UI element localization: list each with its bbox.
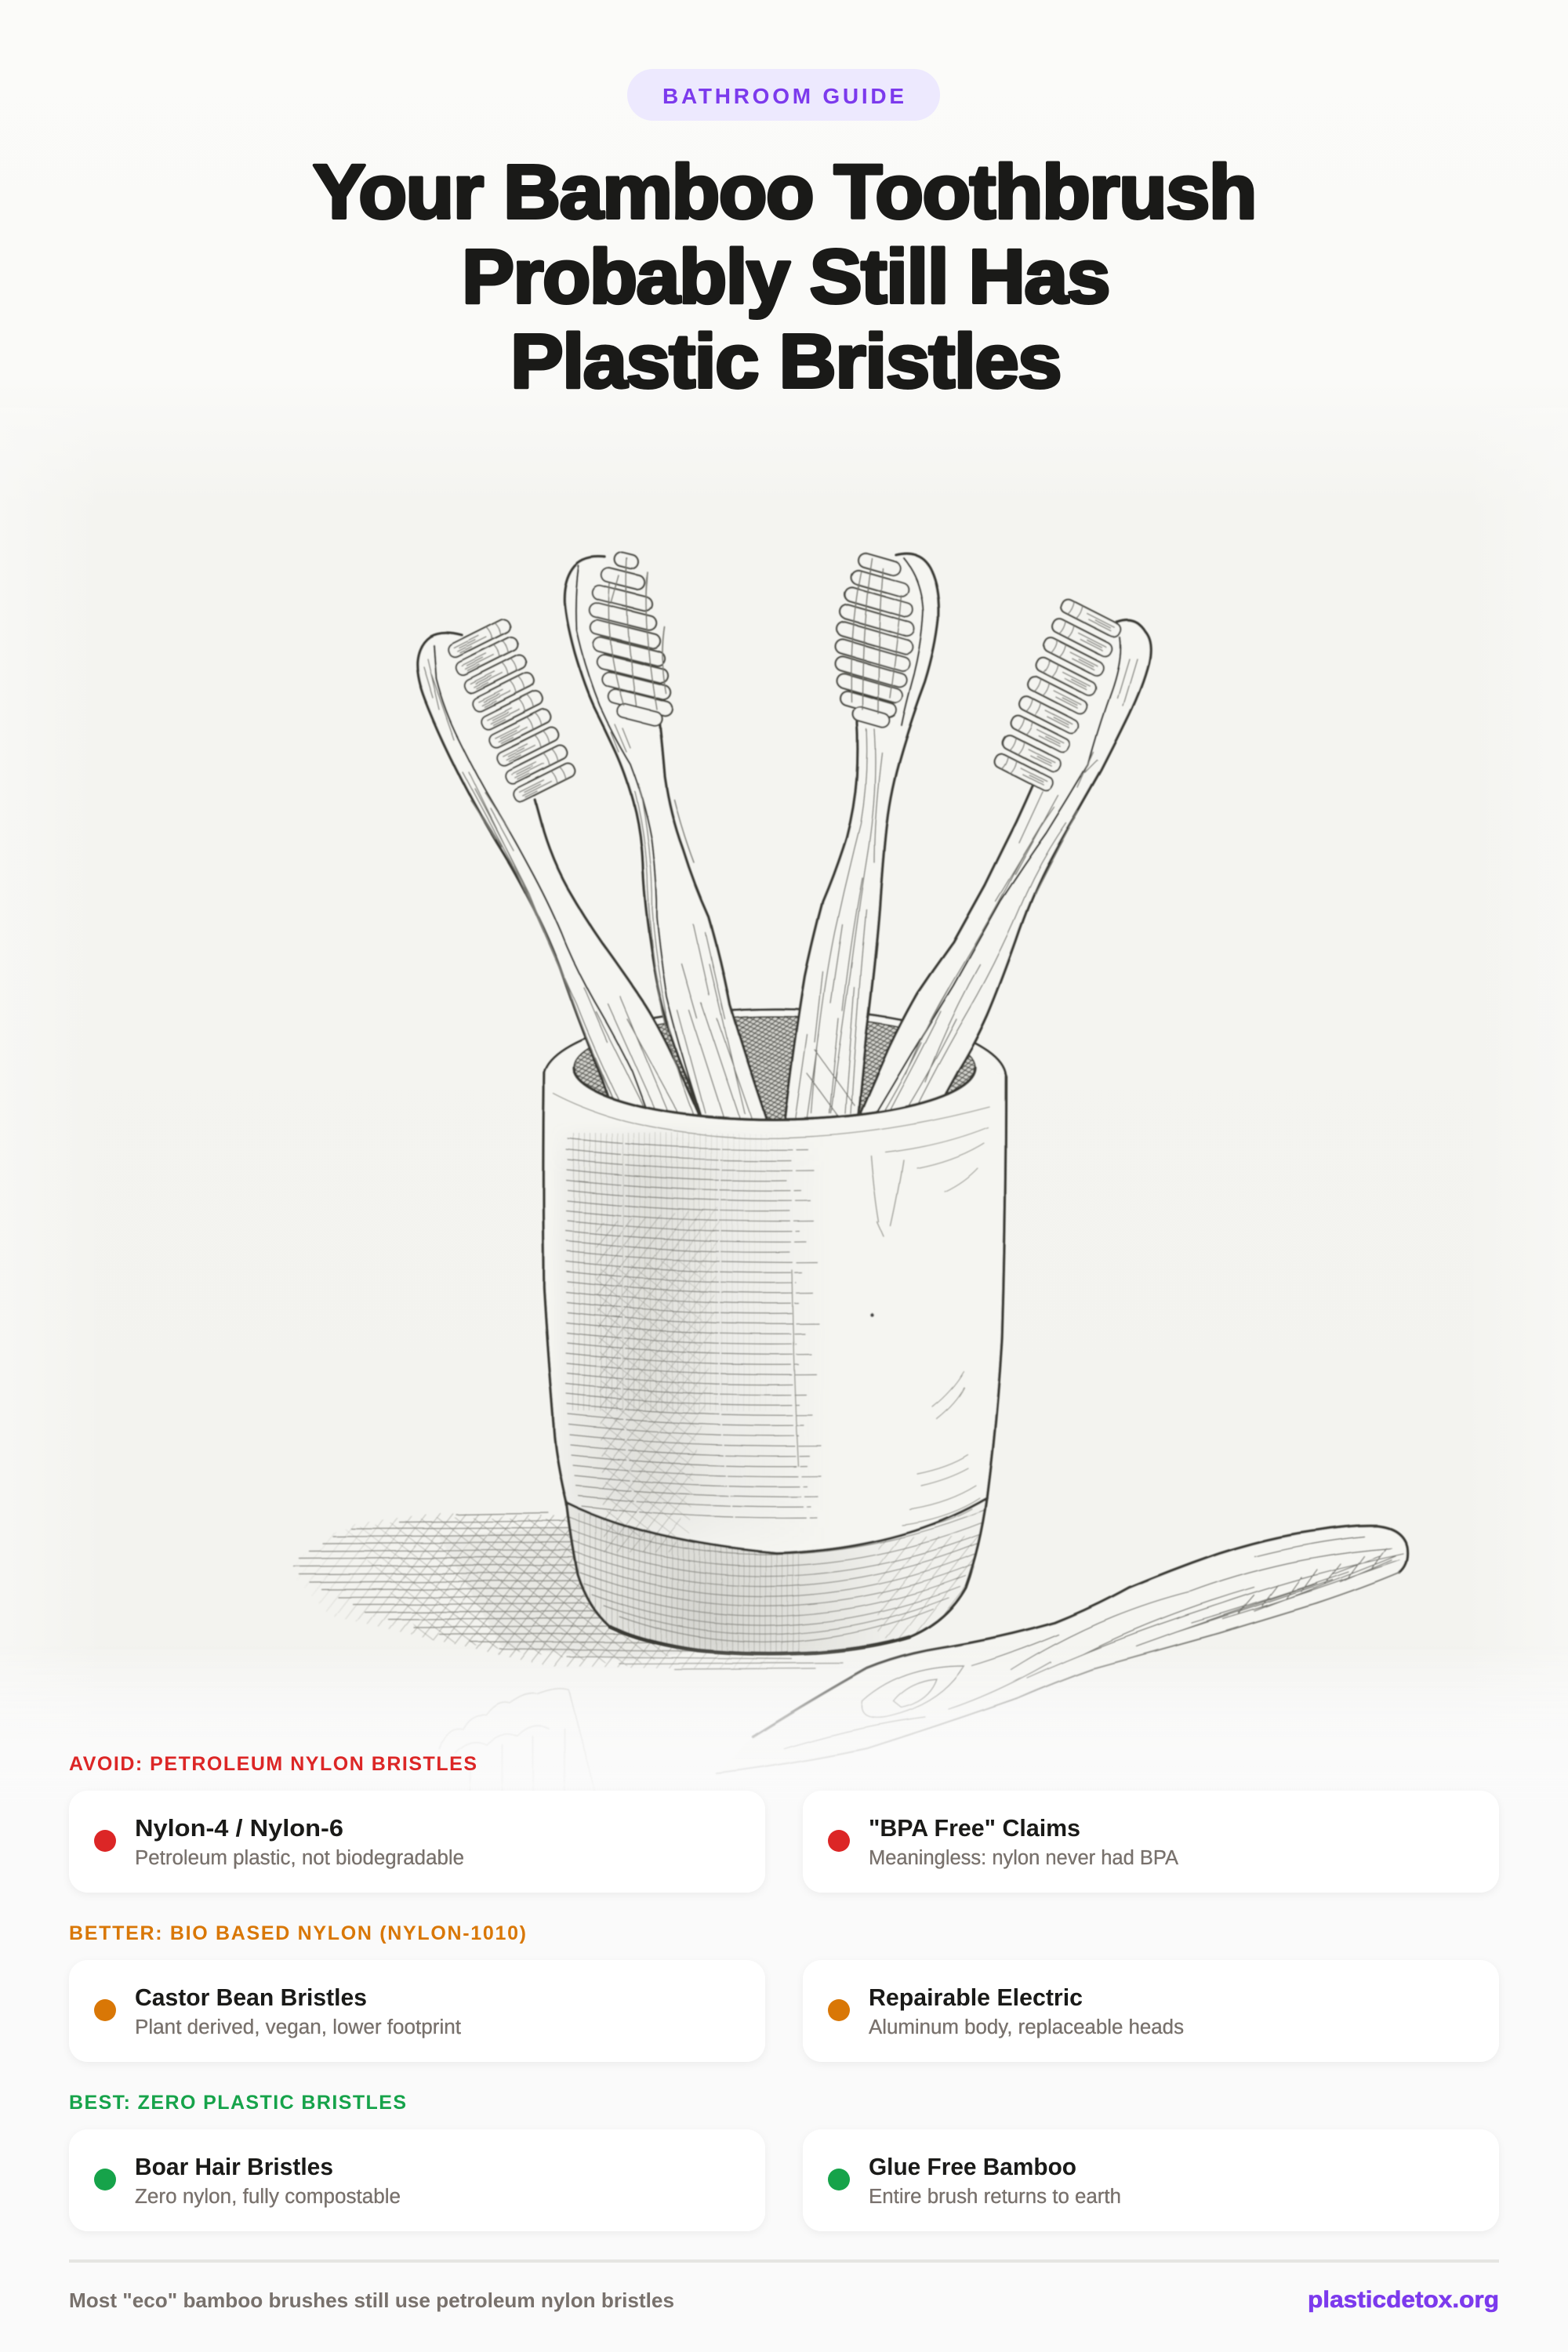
card: glue free bamboo	[803, 2129, 1499, 2231]
footer note: Most "eco" bamboo brushes still use petroleum nylon bristles	[69, 2288, 674, 2312]
card: nylon-4 / nylon-6	[69, 1791, 765, 1893]
lying toothbrush	[717, 1526, 1408, 1773]
card: boar hair bristles: Boar Hair Bristles	[135, 2153, 333, 2180]
heading: best: BEST: ZERO PLASTIC BRISTLES	[69, 2092, 406, 2114]
table shadow hatching	[286, 1513, 843, 1670]
title: Probably Still Has	[462, 234, 1109, 319]
card: nylon-4 / nylon-6: Nylon-4 / Nylon-6	[135, 1814, 343, 1842]
card: castor bean bristles	[69, 1960, 765, 2062]
ghost bristles	[439, 1688, 596, 1795]
title	[313, 149, 1256, 404]
card: glue free bamboo: Glue Free Bamboo	[869, 2153, 1076, 2180]
badge: bathroom guide	[627, 69, 940, 121]
toothbrush 1	[417, 617, 706, 1129]
card: boar hair bristles	[69, 2129, 765, 2231]
toothbrush 2	[564, 551, 770, 1129]
card: boar hair bristles: Zero nylon, fully compostable	[135, 2186, 401, 2208]
card: repairable electric	[803, 1960, 1499, 2062]
toothbrush 3	[784, 551, 938, 1129]
card: nylon-4 / nylon-6: Petroleum plastic, not biodegradable	[135, 1847, 464, 1869]
card: repairable electric: Repairable Electric	[869, 1984, 1083, 2011]
footer url: plasticdetox.org	[1308, 2287, 1499, 2313]
card: bpa free claims	[803, 1791, 1499, 1893]
card: bpa free claims: "BPA Free" Claims	[869, 1814, 1080, 1842]
heading: avoid: AVOID: PETROLEUM NYLON BRISTLES	[69, 1753, 477, 1775]
cup hatching	[541, 1121, 988, 1560]
card: castor bean bristles: Castor Bean Bristles	[135, 1984, 367, 2011]
badge: bathroom guide: BATHROOM GUIDE	[662, 84, 904, 108]
card: bpa free claims: Meaningless: nylon never had BPA	[869, 1847, 1178, 1869]
card: castor bean bristles: Plant derived, vegan, lower footprint	[135, 2016, 461, 2038]
card: glue free bamboo: Entire brush returns to earth	[869, 2186, 1121, 2208]
cup outlines	[543, 1073, 610, 1627]
card: repairable electric: Aluminum body, replaceable heads	[869, 2016, 1184, 2038]
title: Your Bamboo Toothbrush	[313, 149, 1256, 234]
heading: better: BETTER: BIO BASED NYLON (NYLON-1010)	[69, 1922, 526, 1944]
illustration: toothbrushes in a cup	[292, 550, 1410, 1774]
cup back rim and inside	[544, 1007, 1006, 1120]
toothbrush 4	[855, 597, 1150, 1129]
title: Plastic Bristles	[510, 318, 1061, 404]
cup front body	[541, 1068, 1006, 1654]
cup base band hatching	[564, 1497, 992, 1654]
